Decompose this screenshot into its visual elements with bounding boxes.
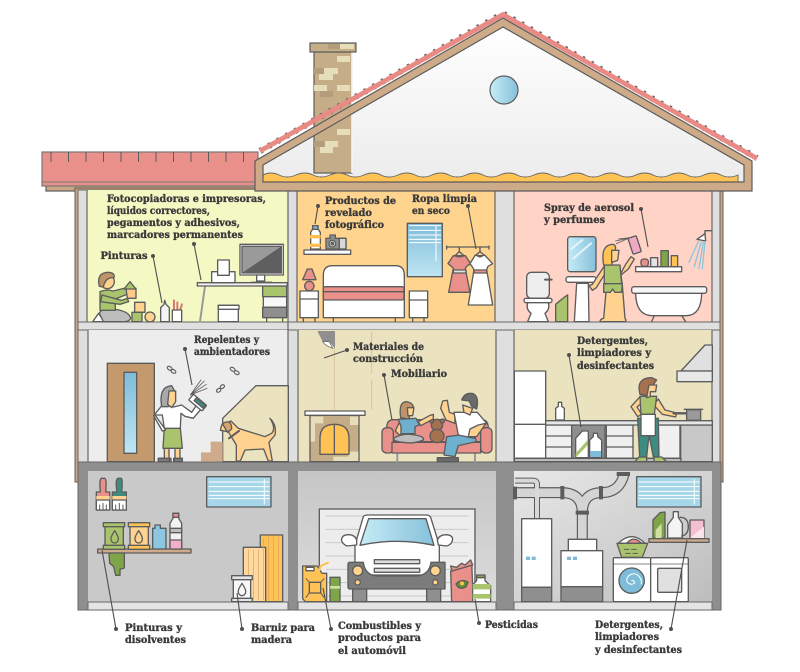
room: garage bbox=[303, 509, 491, 602]
window with blind bbox=[407, 223, 442, 277]
room: office bbox=[93, 244, 287, 322]
room: workshop bbox=[96, 477, 283, 602]
boiler bbox=[561, 539, 603, 602]
pipes bbox=[514, 473, 630, 540]
dog bbox=[220, 418, 275, 461]
laundry basket bbox=[617, 537, 648, 557]
label: productos de revelado: fotográfico bbox=[325, 219, 384, 231]
label: detergentes laundry: limpiadores bbox=[595, 631, 659, 643]
label: pinturas bbox=[100, 250, 162, 303]
label: barniz: Barniz para bbox=[251, 622, 315, 634]
attic gable with chimney bbox=[255, 14, 757, 191]
basement window bbox=[207, 477, 271, 507]
label: combustibles: Combustibles y bbox=[338, 620, 422, 632]
door bbox=[107, 363, 154, 462]
bathtub bbox=[632, 287, 707, 322]
label: detergentes laundry: y desinfectantes bbox=[594, 644, 682, 656]
left lower roof bbox=[42, 152, 258, 191]
desk with computer bbox=[197, 244, 287, 322]
label: ropa limpia: Ropa limpia bbox=[412, 193, 477, 205]
label: fotocopiadoras: Fotocopiadoras e impresoras, bbox=[107, 193, 266, 205]
room: kitchen bbox=[514, 345, 712, 462]
label: pesticidas: Pesticidas bbox=[485, 619, 538, 631]
label: fotocopiadoras: líquidos correctores, bbox=[107, 205, 210, 217]
label: fotocopiadoras: pegamentos y adhesivos, bbox=[107, 217, 240, 229]
label: mobiliario: Mobiliario bbox=[391, 368, 447, 380]
label: detergentes laundry bbox=[594, 540, 687, 656]
shower bbox=[689, 231, 712, 269]
gable frame bbox=[255, 18, 752, 191]
chimney bbox=[310, 43, 356, 173]
label: ropa limpia bbox=[412, 193, 477, 249]
label: productos de revelado: revelado bbox=[325, 207, 372, 219]
room: hallway bbox=[107, 363, 288, 462]
water heater bbox=[522, 519, 552, 602]
label: detergemtes kitchen: desinfectantes bbox=[577, 360, 654, 372]
label: detergemtes kitchen bbox=[567, 335, 654, 427]
label: combustibles bbox=[323, 588, 422, 657]
detergent shelf bbox=[649, 512, 709, 542]
cleaning products bbox=[576, 431, 602, 458]
room: living room bbox=[305, 331, 492, 462]
label: combustibles: productos para bbox=[338, 632, 421, 644]
pesticide products bbox=[451, 560, 491, 602]
scent marks bbox=[167, 366, 240, 393]
fridge bbox=[514, 371, 546, 458]
label: detergemtes kitchen: limpiadores y bbox=[577, 347, 652, 359]
label: repelentes bbox=[183, 334, 270, 385]
room: bedroom bbox=[300, 223, 493, 322]
label: materiales: Materiales de bbox=[353, 341, 424, 353]
label: combustibles: el automóvil bbox=[338, 645, 406, 657]
car bbox=[342, 515, 453, 602]
stairs bbox=[201, 386, 288, 462]
child with blocks bbox=[93, 272, 155, 322]
cleaning bottle bbox=[556, 295, 568, 322]
perfume shelf bbox=[636, 251, 682, 272]
label: spray bbox=[543, 202, 648, 247]
counter and cabinets bbox=[514, 402, 712, 462]
label: detergentes laundry: Detergentes, bbox=[595, 619, 663, 631]
label: pinturas y disolventes: disolventes bbox=[125, 634, 186, 646]
label: fotocopiadoras bbox=[107, 193, 266, 280]
girl bbox=[393, 402, 433, 443]
label: barniz bbox=[237, 593, 315, 646]
label: productos de revelado: Productos de bbox=[325, 195, 396, 207]
sink and mirror bbox=[566, 237, 596, 322]
roof tiles bbox=[260, 14, 757, 158]
basement window bbox=[637, 477, 701, 507]
wall cracks bbox=[317, 331, 372, 410]
label: mobiliario bbox=[382, 368, 447, 420]
house walls and structure bbox=[75, 188, 723, 610]
shelf with photo products bbox=[304, 226, 351, 254]
wood planks bbox=[243, 535, 283, 602]
label: fotocopiadoras: marcadores permanentes bbox=[107, 229, 243, 241]
label: pinturas: Pinturas bbox=[100, 250, 148, 262]
woman with spray bbox=[589, 236, 641, 322]
label: productos de revelado bbox=[315, 195, 396, 231]
toilet bbox=[524, 272, 552, 322]
garage door bbox=[319, 509, 475, 602]
room: bathroom bbox=[524, 231, 712, 322]
fireplace bbox=[305, 411, 365, 462]
fuel can and bottle bbox=[303, 563, 340, 602]
varnish can bbox=[232, 576, 252, 602]
label: spray: Spray de aerosol bbox=[544, 202, 634, 214]
insulation bbox=[263, 173, 738, 182]
glue and pencils bbox=[161, 300, 182, 322]
label: ropa limpia: en seco bbox=[412, 205, 450, 217]
teddy bear bbox=[430, 419, 444, 443]
round window bbox=[490, 76, 518, 104]
label: pesticidas bbox=[475, 599, 538, 631]
washer and dryer bbox=[613, 558, 688, 602]
label: barniz: madera bbox=[251, 634, 292, 646]
bed and nightstands bbox=[300, 266, 428, 322]
man bbox=[437, 393, 487, 462]
paint brushes bbox=[96, 478, 126, 510]
woman with repellent bbox=[154, 380, 207, 462]
room: laundry bbox=[514, 473, 709, 602]
sofa with family bbox=[382, 393, 492, 462]
label: repelentes: ambientadores bbox=[194, 346, 270, 358]
label: spray: y perfumes bbox=[543, 214, 605, 226]
label: repelentes: Repelentes y bbox=[194, 334, 260, 346]
label: materiales: construcción bbox=[353, 353, 423, 365]
shelf with paints bbox=[98, 513, 191, 575]
range hood bbox=[677, 345, 712, 382]
hanging clothes bbox=[447, 246, 493, 305]
label: detergemtes kitchen: Detergemtes, bbox=[577, 335, 648, 347]
woman cooking bbox=[631, 378, 703, 462]
label: pinturas y disolventes: Pinturas y bbox=[125, 622, 183, 634]
label: materiales bbox=[324, 341, 424, 365]
label: pinturas y disolventes bbox=[102, 550, 186, 646]
